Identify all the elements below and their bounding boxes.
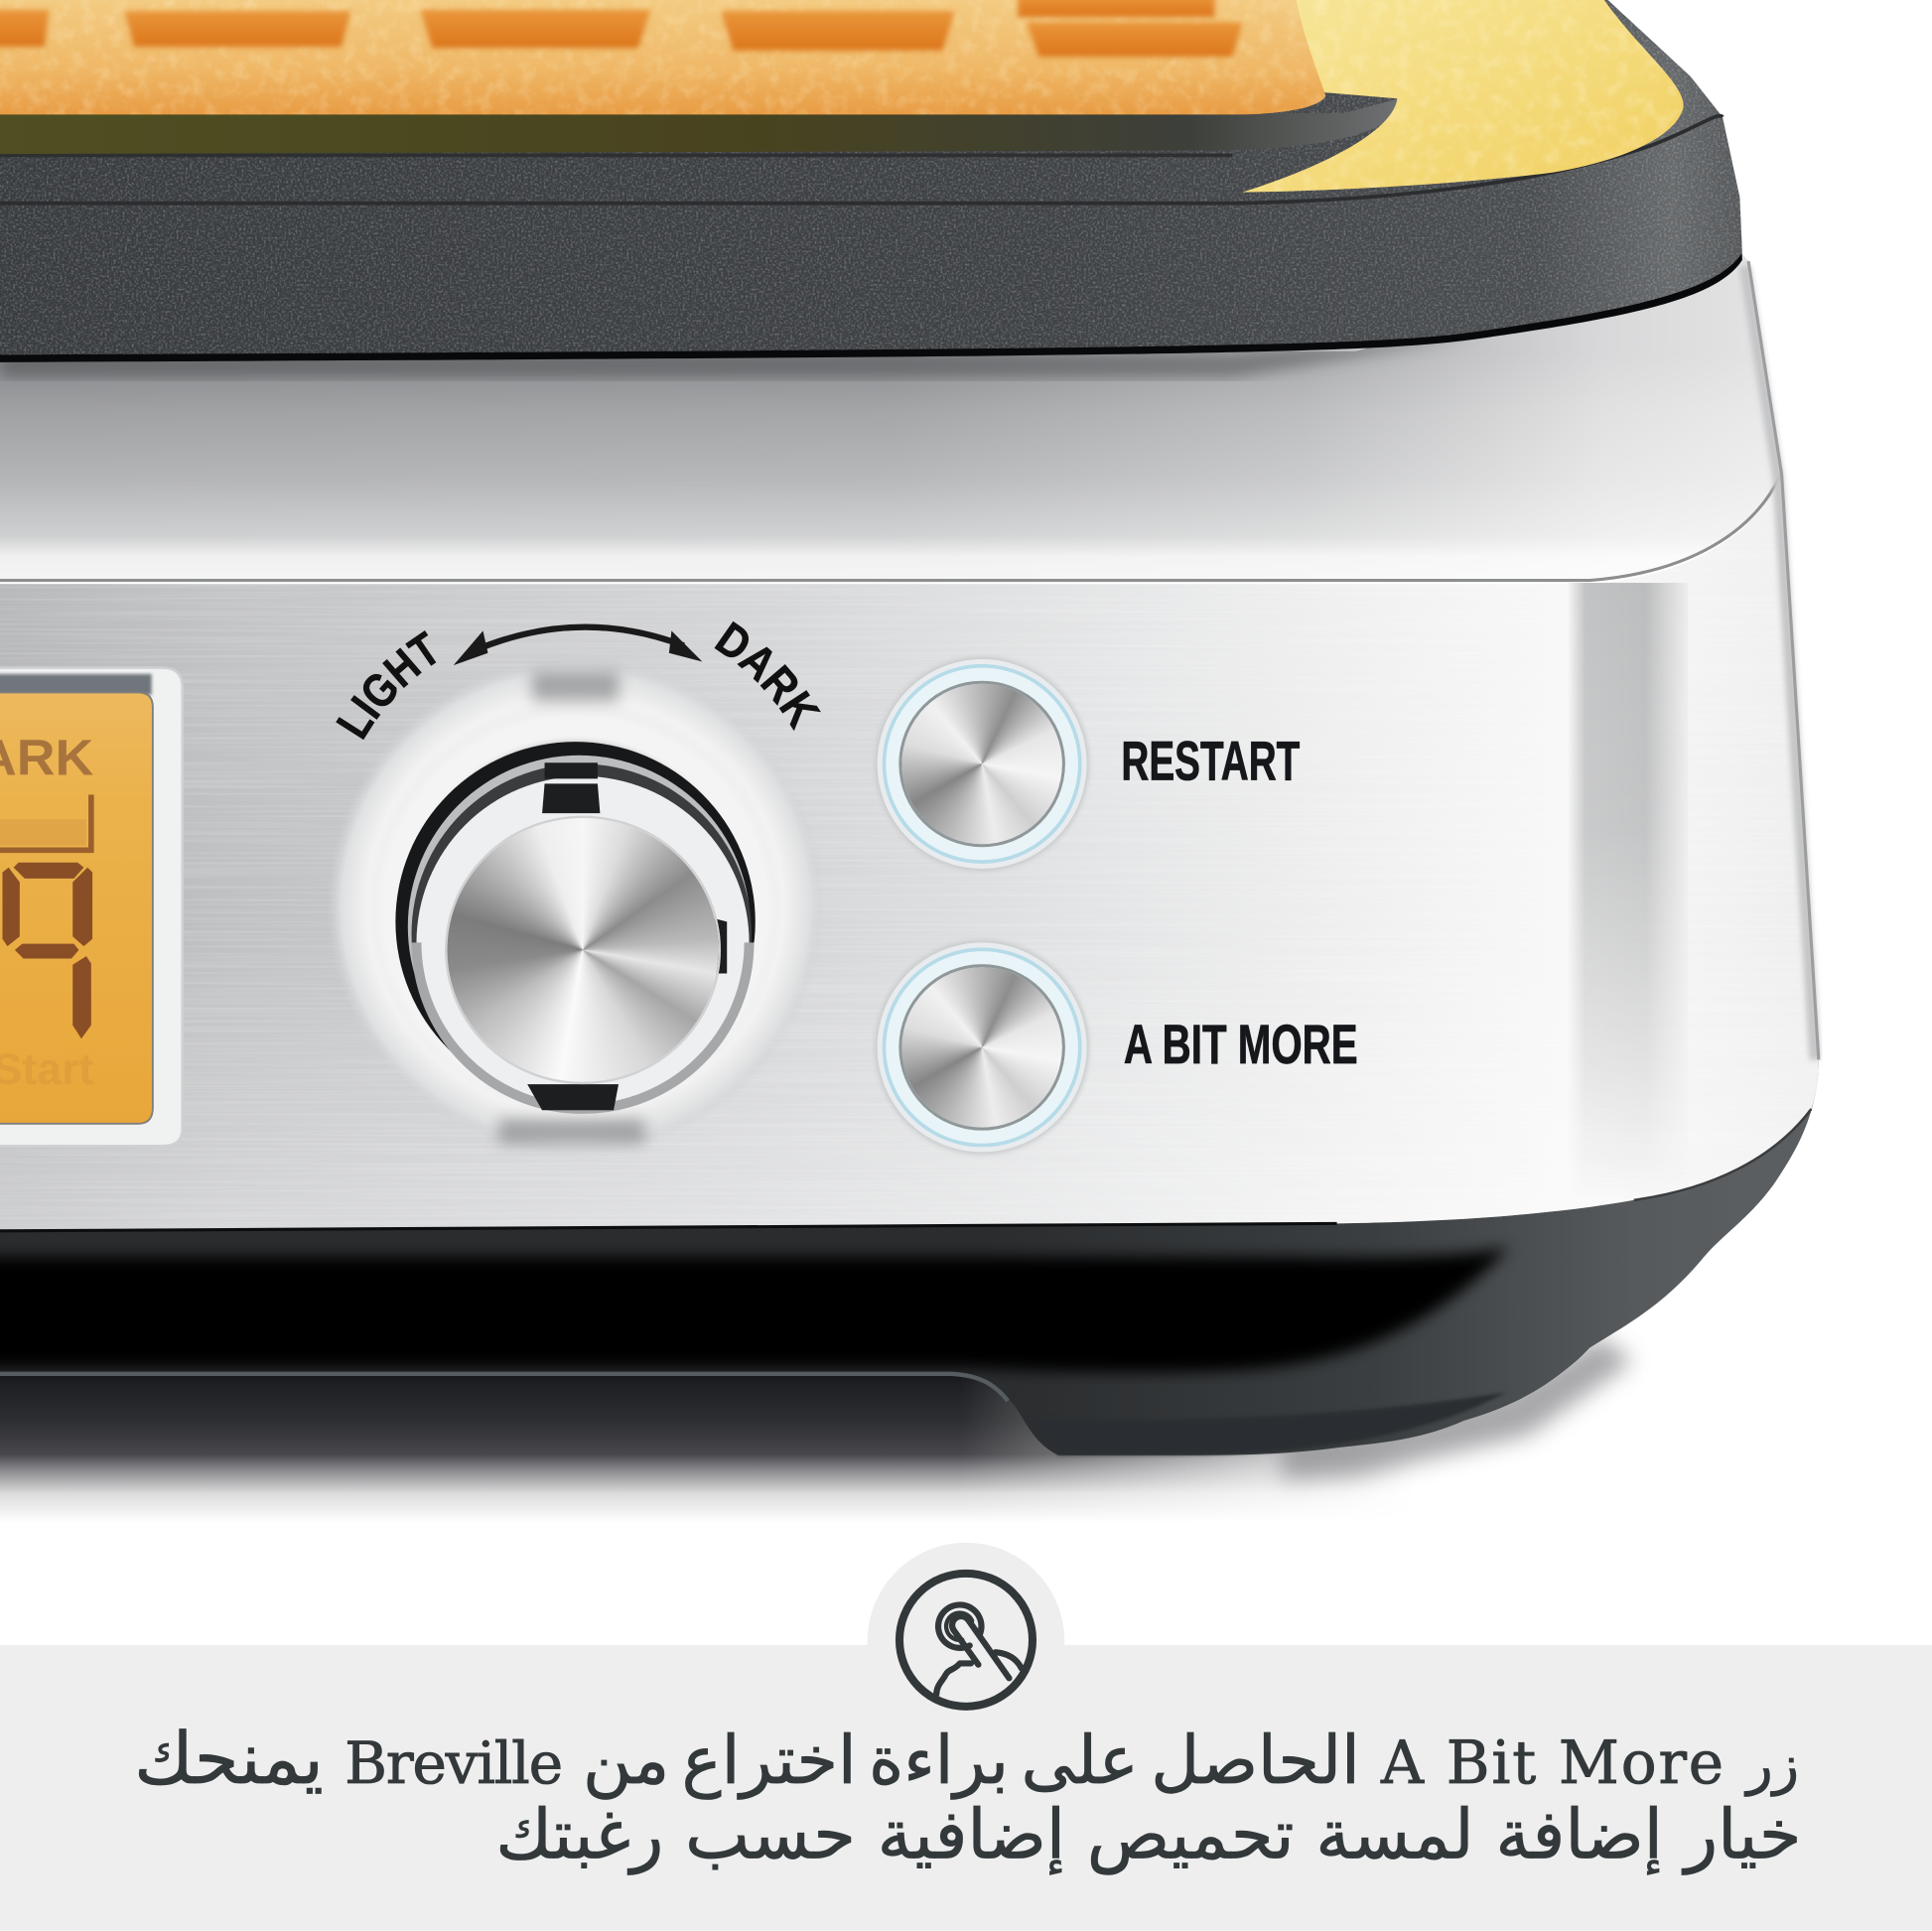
shadow under plate bbox=[0, 336, 1478, 377]
icon: finger touch bbox=[899, 1574, 1033, 1707]
dark waffle plate bbox=[0, 0, 1742, 362]
upper body band bbox=[0, 252, 1782, 582]
chrome knob disc bbox=[448, 818, 719, 1082]
display bezel bbox=[0, 668, 183, 1146]
collar shadows bbox=[499, 671, 644, 1144]
chrome highlights bbox=[527, 762, 727, 1110]
waffle bbox=[0, 0, 1325, 114]
caption line 2: خيار إضافة لمسة تحميص إضافية حسب رغبتك bbox=[495, 1795, 1801, 1875]
lower body panel bbox=[0, 475, 1819, 1231]
waffle shadow on plate bbox=[0, 98, 1399, 154]
knob socket bbox=[395, 742, 756, 1102]
base and foot bbox=[0, 1059, 1819, 1455]
seven-segment digit bbox=[2, 863, 92, 1038]
caption line 1: زر A Bit More الحاصل على براءة اختراع من Breville يمنحك bbox=[134, 1717, 1799, 1800]
RESTART label: RESTART bbox=[1121, 730, 1300, 792]
base dark strip at bottom of foot bbox=[1029, 1392, 1506, 1455]
LCD display bbox=[0, 668, 183, 1146]
caption panel bbox=[0, 1543, 1932, 1931]
darkness scale bbox=[0, 794, 91, 850]
stainless body bbox=[0, 252, 1819, 1231]
base black recess bbox=[0, 1247, 1509, 1372]
floor shadow bbox=[0, 1337, 1632, 1525]
reflection band bbox=[1568, 583, 1688, 1199]
knob collar bbox=[327, 656, 824, 1155]
LIGHT label: LIGHT bbox=[336, 630, 437, 741]
button: restart bbox=[878, 659, 1087, 869]
waffle pockets bbox=[0, 0, 1243, 57]
base highlight line bbox=[0, 1374, 1008, 1401]
arrow light to dark bbox=[454, 627, 702, 665]
body seam bbox=[0, 472, 1782, 581]
batter bbox=[1242, 0, 1684, 193]
button: a bit more bbox=[878, 942, 1087, 1152]
DARK label: DARK bbox=[715, 621, 821, 731]
display screen bbox=[0, 692, 153, 1124]
A BIT MORE label: A BIT MORE bbox=[1124, 1013, 1358, 1075]
